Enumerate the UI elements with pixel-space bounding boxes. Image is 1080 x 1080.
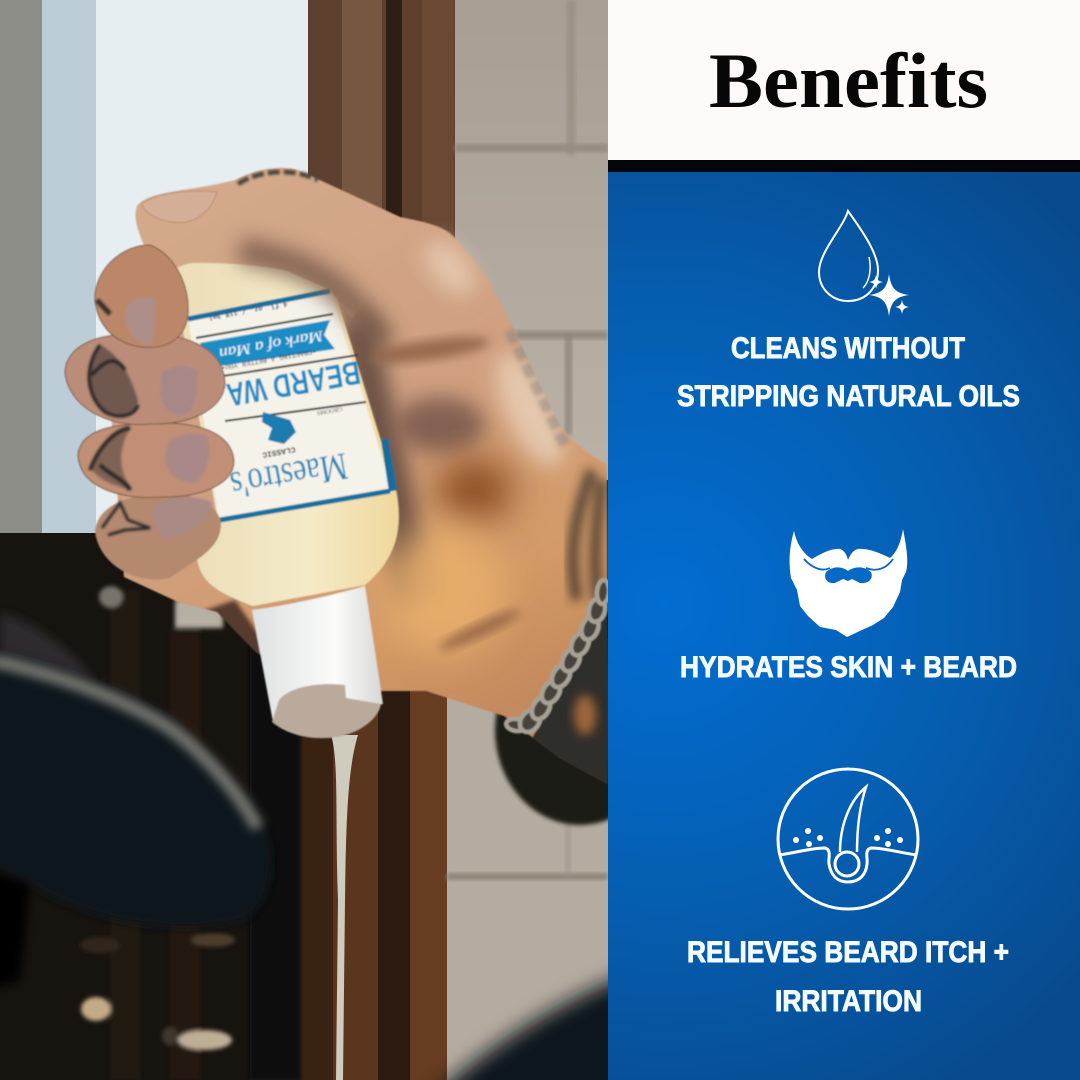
- bottle label: Mark of a Man: [218, 327, 325, 361]
- hand and bottle photo group: [65, 168, 612, 790]
- icon: water drop with sparkles: [819, 211, 909, 316]
- bottle: [172, 259, 399, 738]
- text: cleans without stripping natural oils: STRIPPING NATURAL OILS: [677, 380, 1020, 413]
- fingers: [65, 245, 234, 579]
- header panel: [608, 0, 1080, 160]
- palm: [110, 168, 612, 790]
- text: relieves beard itch + irritation: IRRITATION: [775, 985, 922, 1018]
- text: cleans without stripping natural oils: CLEANS WITHOUT: [731, 332, 965, 365]
- middle finger: [65, 335, 225, 424]
- bottle label: •CRAFTING A BETTER YOU•: [220, 346, 317, 371]
- text: hydrates skin + beard: HYDRATES SKIN + BEARD: [680, 651, 1017, 684]
- bottle label: 4 fl. oz. / 118.3ml: [208, 299, 288, 321]
- divider bar: [608, 160, 1080, 172]
- bottle label: BEARD WA: [224, 354, 363, 414]
- text: cleans without stripping natural oils: [677, 332, 1020, 413]
- bottle cap: [252, 586, 383, 738]
- icon: hair follicle in circle: [778, 769, 918, 909]
- index finger: [95, 245, 188, 348]
- chain bracelet: [505, 580, 610, 736]
- text: relieves beard itch + irritation: RELIEVES BEARD ITCH +: [687, 936, 1009, 969]
- blurred foreground dark object: [0, 612, 272, 990]
- icon: beard: [790, 529, 907, 637]
- bottle label: GROOMS: [316, 405, 343, 415]
- photo panel: hand squeezing beard wash bottle: [0, 0, 665, 1080]
- blurred background shelf and lights: [80, 586, 300, 1080]
- ring finger: [78, 423, 234, 498]
- window and wall background: [0, 0, 665, 1080]
- text: relieves beard itch + irritation: [687, 936, 1009, 1018]
- bottle body: [172, 259, 399, 606]
- benefits panel: [608, 172, 1080, 1080]
- thumb: [137, 168, 484, 345]
- title: Benefits: [709, 37, 988, 124]
- bottle label: CLASSIC: [261, 444, 296, 459]
- liquid stream: [331, 735, 358, 1080]
- bottle label: Maestro's: [227, 444, 351, 507]
- little finger: [95, 494, 221, 579]
- bottle label: [188, 290, 397, 521]
